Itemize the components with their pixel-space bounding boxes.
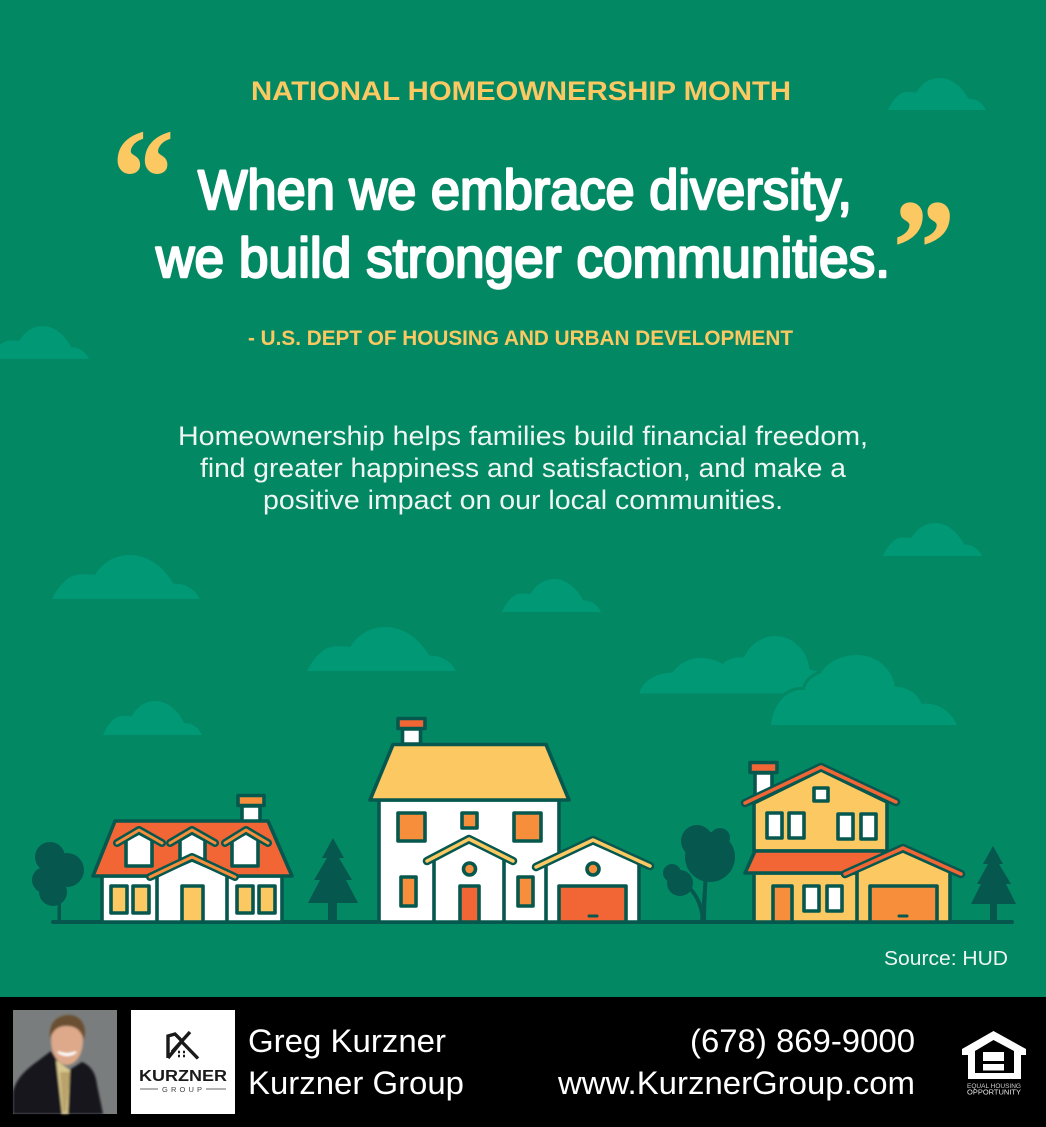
- icon: closing quote mark: ”: [893, 173, 955, 324]
- icon: opening quote mark: “: [112, 103, 174, 253]
- title: NATIONAL HOMEOWNERSHIP MONTH: [251, 76, 791, 106]
- icon: pine tree: [308, 838, 358, 922]
- quote heading: [155, 158, 890, 289]
- house: right yellow: [745, 762, 961, 922]
- house: centre two-storey: [370, 718, 650, 922]
- icon: pine tree right: [971, 846, 1016, 922]
- source note: Source: HUD: [884, 948, 1008, 970]
- body text: [178, 421, 868, 515]
- company logo: [131, 1010, 235, 1114]
- company logo: GROUP: [162, 1085, 202, 1094]
- footer bar: [0, 997, 1046, 1127]
- icon: logo house mark: [168, 1032, 198, 1058]
- attribution: - U.S. DEPT OF HOUSING AND URBAN DEVELOPMENT: [248, 327, 793, 350]
- icon: equal housing opportunity: EQUAL HOUSING: [967, 1083, 1021, 1090]
- agent photo: [13, 1010, 117, 1114]
- house: left cottage: [93, 796, 292, 922]
- quote heading: When we embrace diversity,: [198, 158, 852, 221]
- agent name: [248, 1023, 464, 1101]
- clouds: [0, 78, 986, 735]
- body text: find greater happiness and satisfaction, and make a: [200, 453, 847, 483]
- company logo: KURZNER: [139, 1068, 227, 1085]
- icon: equal housing opportunity: [962, 1031, 1026, 1096]
- quote heading: we build stronger communities.: [155, 226, 890, 289]
- agent name: Greg Kurzner: [248, 1023, 446, 1059]
- body text: Homeownership helps families build financial freedom,: [178, 421, 868, 451]
- contact details: [557, 1023, 915, 1101]
- agent name: Kurzner Group: [248, 1065, 464, 1101]
- contact details: www.KurznerGroup.com: [557, 1065, 915, 1101]
- icon: right tree: [663, 825, 735, 921]
- icon: equal housing opportunity: OPPORTUNITY: [967, 1090, 1021, 1096]
- body text: positive impact on our local communities.: [263, 485, 783, 515]
- ground line: [53, 920, 1012, 924]
- icon: left tree: [32, 842, 84, 922]
- contact details: (678) 869-9000: [690, 1023, 915, 1059]
